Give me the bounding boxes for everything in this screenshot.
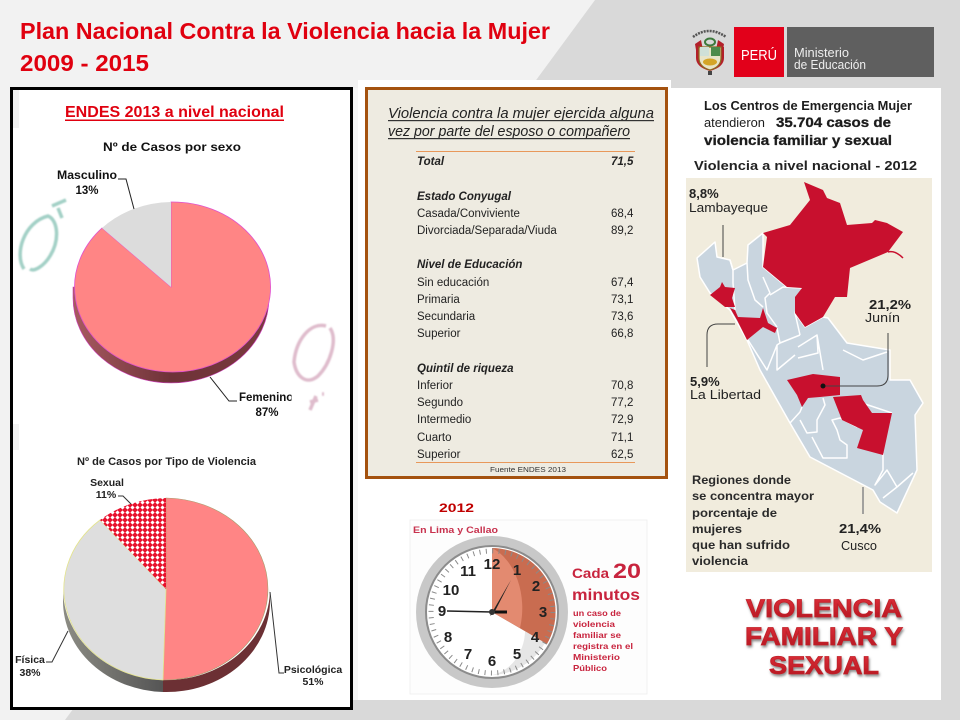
panel: map	[686, 178, 932, 572]
icon: clock: 3	[539, 604, 547, 621]
panel: table	[366, 88, 666, 478]
icon: clock: 6	[488, 653, 496, 670]
icon: clock: 9	[438, 603, 446, 620]
table: Divorciada/Separada/Viuda	[417, 225, 557, 237]
table: Nivel de Educación	[417, 259, 522, 271]
icon: coat of arms	[693, 31, 726, 75]
icon: clock	[416, 536, 568, 688]
map of Peru	[697, 182, 923, 513]
icon: clock: 12	[484, 556, 500, 573]
table: Secundaria	[417, 311, 476, 323]
icon: clock: 4	[531, 629, 540, 646]
label: Masculino	[57, 170, 134, 209]
label: Junín: Junín	[865, 311, 900, 325]
title: Plan Nacional Contra la Violencia hacia la Mujer	[20, 18, 550, 44]
map note	[692, 473, 814, 568]
red box: Perú: PERÚ	[741, 47, 777, 64]
regions base	[697, 233, 923, 513]
label: Psicológica	[270, 592, 342, 688]
table: Estado Conyugal	[417, 191, 512, 203]
icon: clock: 10	[443, 582, 459, 599]
icon: clock: 7	[464, 646, 472, 663]
map heading: Violencia a nivel nacional - 2012	[694, 159, 917, 173]
label: Sexual: Sexual	[90, 477, 124, 489]
label: Junín	[865, 297, 911, 325]
label: La Libertad	[690, 374, 761, 402]
map note: porcentaje de	[692, 506, 777, 520]
slice: Femenino	[75, 202, 271, 372]
table: 71,1	[611, 432, 633, 444]
label: Masculino: 13%	[75, 185, 99, 197]
table: 72,9	[611, 414, 633, 426]
icon: clock: 2	[532, 578, 540, 595]
label: Cusco: Cusco	[841, 539, 877, 553]
panel: ENDES 2013	[12, 88, 352, 708]
chart title: Nº de Casos por sexo	[103, 140, 241, 154]
wordart: Violencia familiar y sexual	[745, 595, 903, 680]
region: Lambayeque	[710, 282, 735, 307]
label: Femenino	[210, 377, 293, 419]
table: 77,2	[611, 397, 633, 409]
clock caption: un caso de	[573, 608, 621, 618]
label: Cusco	[839, 521, 881, 553]
text block: Centros de Emergencia Mujer: atendieron	[704, 115, 765, 130]
pie side	[73, 287, 269, 383]
label: La Libertad: 5,9%	[690, 374, 720, 389]
table: Quintil de riqueza	[417, 363, 514, 375]
table: 71,5	[611, 156, 634, 168]
table heading	[388, 106, 654, 140]
panel: clock	[410, 520, 647, 694]
chart: Nº de Casos por Tipo de Violencia	[15, 456, 342, 692]
label: Lambayeque: Lambayeque	[689, 201, 768, 215]
text block: Centros de Emergencia Mujer: 35.704 casos de	[776, 114, 891, 130]
text block: Centros de Emergencia Mujer	[704, 98, 912, 148]
label: Lambayeque: 8,8%	[689, 186, 719, 201]
text block: Centros de Emergencia Mujer: violencia familiar y sexual	[704, 132, 892, 148]
label: Psicológica: 51%	[302, 676, 324, 688]
clock caption: registra en el	[573, 641, 633, 651]
map note: que han sufrido	[692, 538, 790, 552]
red box: Perú	[734, 27, 784, 77]
table: Superior	[417, 328, 461, 340]
table: 67,4	[611, 277, 634, 289]
label: La Libertad: La Libertad	[690, 388, 761, 402]
label: Física: Física	[15, 654, 45, 666]
icon: female symbol	[294, 325, 333, 410]
label: Física: 38%	[19, 667, 41, 679]
table heading: Violencia contra la mujer ejercida alguna	[388, 106, 654, 122]
table: 73,1	[611, 294, 633, 306]
table: Primaria	[417, 294, 460, 306]
map note: se concentra mayor	[692, 489, 814, 503]
icon: male symbol	[20, 200, 66, 270]
icon: clock: 8	[444, 629, 452, 646]
gray box: Ministerio de Educación: de Educación	[794, 58, 866, 72]
table heading: vez por parte del esposo o compañero	[388, 124, 630, 140]
region borders	[730, 260, 913, 498]
region: Cusco	[833, 395, 892, 455]
label: Femenino: Femenino	[239, 392, 293, 404]
slice: Psicológica	[163, 498, 268, 680]
clock caption: minutos	[572, 587, 640, 604]
title: 2009 - 2015	[20, 50, 149, 76]
slice: Sexual	[100, 498, 166, 589]
leader lines	[707, 225, 888, 514]
icon: clock: 11	[460, 563, 476, 580]
table	[416, 152, 635, 462]
clock heading: En Lima y Callao	[413, 525, 498, 536]
clock caption	[572, 560, 641, 673]
table: 89,2	[611, 225, 633, 237]
table: 73,6	[611, 311, 633, 323]
label: Junín: 21,2%	[869, 297, 911, 312]
table: Segundo	[417, 397, 463, 409]
text block: Centros de Emergencia Mujer: Los Centros de Emergencia Mujer	[704, 98, 912, 113]
label: Cusco: 21,4%	[839, 521, 881, 536]
clock caption: violencia	[573, 619, 615, 629]
map note: mujeres	[692, 522, 742, 536]
map note: Regiones donde	[692, 473, 791, 487]
slice: Masculino	[102, 202, 171, 287]
label: Masculino: Masculino	[57, 170, 117, 182]
logo: Ministerio de Educación	[693, 27, 934, 77]
table: Casada/Conviviente	[417, 208, 520, 220]
table: Cuarto	[417, 432, 452, 444]
title	[20, 18, 550, 76]
year label: 2012	[439, 501, 474, 515]
label: Femenino: 87%	[255, 407, 279, 419]
gray box: Ministerio de Educación	[787, 27, 934, 77]
table: 70,8	[611, 380, 633, 392]
wordart: Violencia familiar y sexual: FAMILIAR Y	[745, 623, 903, 651]
clock caption: Ministerio	[573, 652, 620, 662]
table: Inferior	[417, 380, 453, 392]
label: Lambayeque	[689, 186, 768, 215]
gray box: Ministerio de Educación: Ministerio	[794, 46, 849, 60]
chart: Nº de Casos por sexo	[20, 140, 333, 419]
map note: violencia	[692, 554, 748, 568]
source note: Fuente ENDES 2013	[490, 465, 566, 474]
table: Superior	[417, 449, 461, 461]
wordart: Violencia familiar y sexual: SEXUAL	[769, 652, 879, 680]
region: Loreto	[763, 182, 903, 327]
table: 66,8	[611, 328, 633, 340]
heading: ENDES 2013 a nivel nacional: ENDES 2013 a nivel nacional	[65, 104, 284, 121]
icon: clock: 1	[513, 562, 521, 579]
label: Psicológica: Psicológica	[284, 664, 342, 676]
pie side: Psicológica	[163, 589, 270, 692]
table: 62,5	[611, 449, 633, 461]
clock caption: Cada	[572, 565, 609, 581]
clock caption: familiar se	[573, 630, 621, 640]
label: Física	[15, 631, 68, 679]
pie side: Física	[63, 589, 163, 692]
region: Junín	[787, 374, 840, 407]
region: La Libertad	[730, 308, 777, 340]
chart title: Nº de Casos por Tipo de Violencia	[77, 456, 257, 468]
table: Intermedio	[417, 414, 471, 426]
clock caption: Público	[573, 663, 607, 673]
clock caption: 20	[613, 560, 641, 583]
slice: Física	[64, 520, 166, 680]
wordart: Violencia familiar y sexual: VIOLENCIA	[746, 595, 902, 623]
label: Sexual	[90, 477, 131, 504]
table: Total	[417, 156, 445, 168]
table: 68,4	[611, 208, 634, 220]
icon: clock: 5	[513, 646, 521, 663]
label: Sexual: 11%	[96, 489, 117, 501]
table: Sin educación	[417, 277, 489, 289]
white content panel	[358, 80, 941, 700]
